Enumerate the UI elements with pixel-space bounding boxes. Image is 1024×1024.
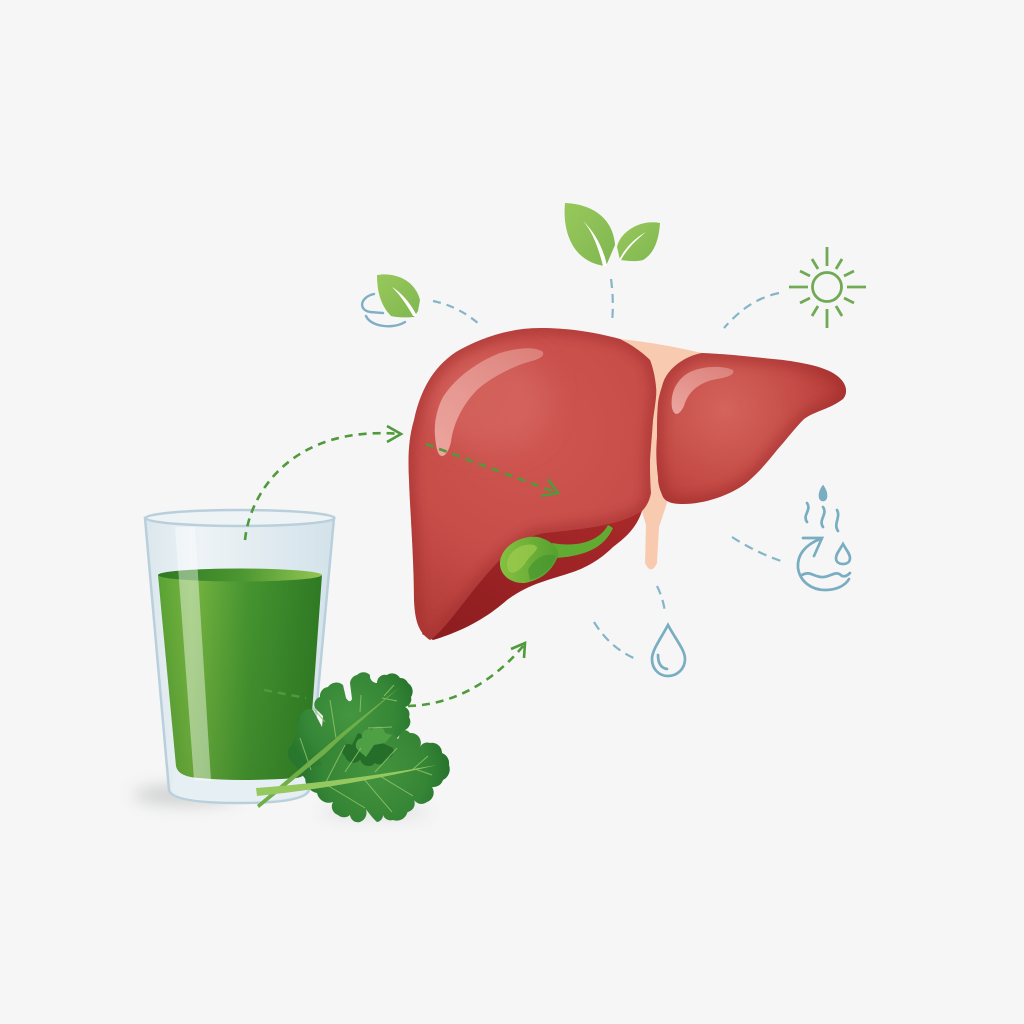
liver underside [422,511,642,640]
kale veins [300,685,432,812]
connector: leaf to liver [433,301,479,324]
arrow: glass to liver top [245,426,401,540]
small drop [836,544,850,564]
cycle arrow [798,538,849,590]
glass shadow [133,785,237,805]
left lobe rim shade [656,353,846,504]
icon: sun [789,247,866,328]
connector: ligament to drop [657,586,665,612]
sprout veins [583,221,646,266]
vapour lines [806,503,838,531]
kale curled highlight [356,727,392,757]
right lobe highlight [435,348,543,456]
arrow: glass to liver bottom [264,643,525,706]
right lobe [408,328,656,640]
juice lower shading [158,575,322,780]
connector: sprout to liver [611,279,613,323]
glass highlight [175,527,211,781]
small sprout leaf [617,222,660,261]
right lobe soft glow [434,352,544,445]
right lobe rim shade [409,328,656,640]
glass rim [146,510,334,526]
left lobe [656,353,846,504]
ligament [620,339,702,570]
arrow: inside liver [426,444,558,496]
icon: glass of green juice [133,510,334,805]
icon: water cycle [798,487,850,590]
gallbladder shine [507,544,537,573]
kale shadow [320,805,430,819]
gallbladder sac [500,537,558,583]
left lobe highlight [672,367,733,414]
juice surface [158,568,322,582]
glass base [172,770,310,801]
infographic canvas [133,203,866,822]
connector: left of drop [594,622,636,659]
connector: sun to liver [724,293,779,328]
right lobe fill [408,328,656,640]
glass body [145,518,334,803]
icon: kale leaves [256,672,450,822]
gallbladder shade [528,555,556,580]
left lobe fill [656,353,846,504]
connector: water cycle to liver [732,537,781,561]
large sprout leaf [565,203,615,266]
juice [158,575,322,780]
waves [802,573,850,577]
icon: water drop [652,625,685,676]
icon: leaf with swirl [362,274,420,326]
icon: liver [400,320,855,650]
icon: sprout with two leaves [565,203,660,266]
gallbladder [500,525,613,583]
top droplet [820,487,826,500]
kale upper leaf [288,672,413,785]
kale dark curl [342,733,394,766]
kale lower leaf [305,727,450,822]
swirl [362,294,405,326]
leaf [377,274,420,317]
leaf vein [392,287,417,316]
kale upper stem [257,687,400,808]
kale lower stem [256,765,437,796]
gallbladder duct [552,525,613,558]
